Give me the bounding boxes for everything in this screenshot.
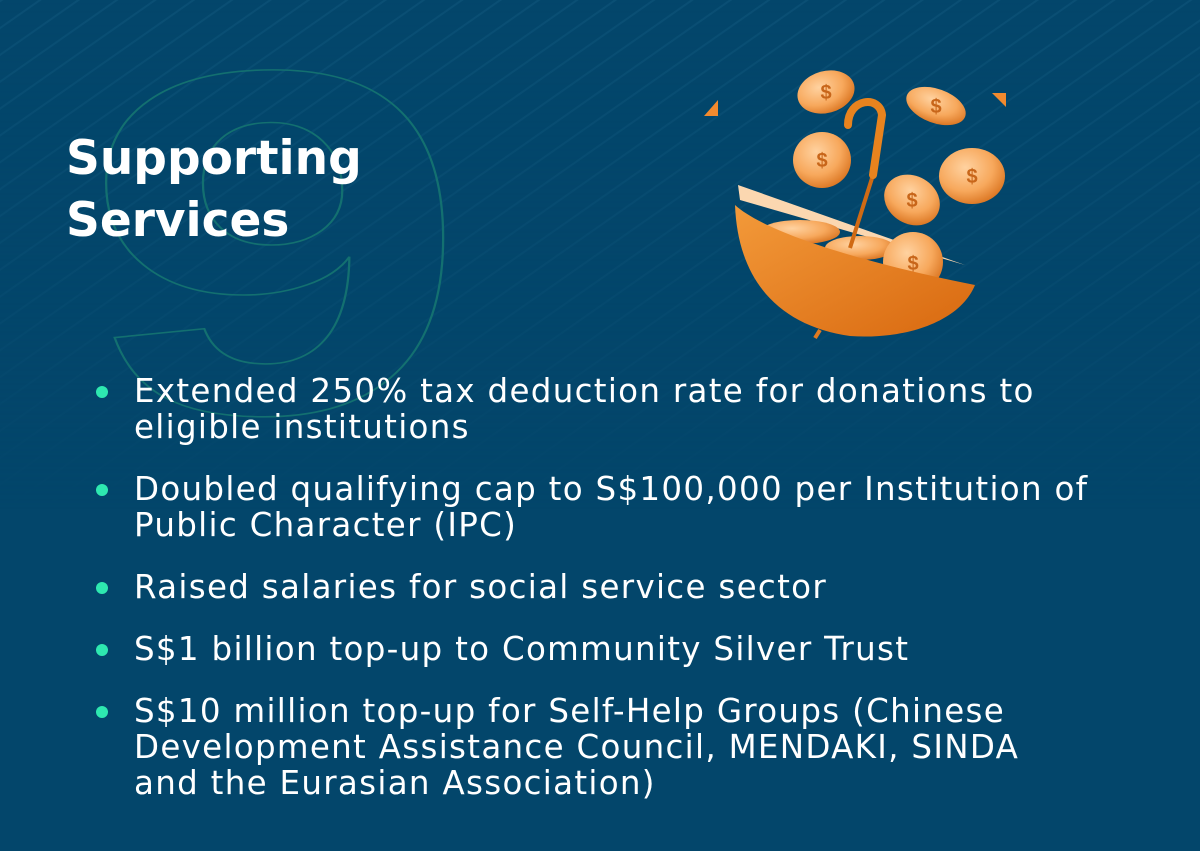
- illustration: umbrella with coins: $: [966, 166, 978, 188]
- title: Services: [66, 193, 289, 248]
- bullet list: S$10 million top-up for Self-Help Groups (Chinese: [134, 692, 1005, 730]
- bullet list: [96, 372, 1088, 802]
- bullet list: Extended 250% tax deduction rate for donations to: [134, 372, 1035, 410]
- bullet list: eligible institutions: [134, 408, 470, 446]
- title: [66, 131, 362, 248]
- bullet list: and the Eurasian Association): [134, 764, 656, 802]
- illustration: umbrella with coins: $: [907, 253, 919, 275]
- illustration: umbrella with coins: $: [930, 96, 942, 118]
- illustration: umbrella with coins: $: [820, 82, 832, 104]
- umbrella bowl: [735, 205, 975, 337]
- bullet list: Development Assistance Council, MENDAKI, SINDA: [134, 728, 1019, 766]
- bullet list: Public Character (IPC): [134, 506, 517, 544]
- bullet list: Doubled qualifying cap to S$100,000 per Institution of: [134, 470, 1088, 508]
- bullet list: S$1 billion top-up to Community Silver Trust: [134, 630, 909, 668]
- illustration: umbrella with coins: $: [816, 150, 828, 172]
- bullet list: Raised salaries for social service sector: [134, 568, 827, 606]
- title: Supporting: [66, 131, 362, 186]
- illustration: umbrella with coins: $: [906, 190, 918, 212]
